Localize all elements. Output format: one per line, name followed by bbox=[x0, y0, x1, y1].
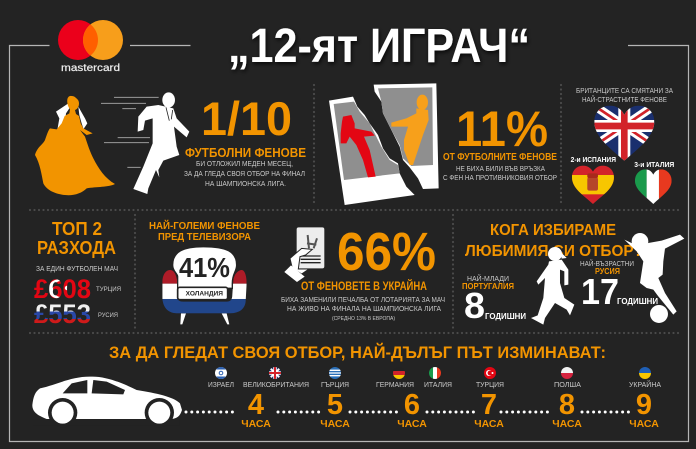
panel heading: choosing a team: ЛЮБИМИЯ СИ ОТБОР? bbox=[465, 243, 643, 260]
panel: top 2 expenses bbox=[34, 219, 121, 329]
stat: 11%: ОТ ФУТБОЛНИТЕ ФЕНОВЕ bbox=[443, 151, 557, 163]
panel: top 2 expenses: £608 bbox=[34, 274, 91, 304]
stat: youngest fans: НАЙ-МЛАДИ bbox=[467, 274, 509, 283]
stat: 66%: (СРЕДНО 13% В ЕВРОПА) bbox=[332, 316, 395, 322]
icon: car bbox=[32, 377, 182, 427]
icon: Spain heart: 2-и ИСПАНИЯ bbox=[571, 157, 616, 164]
stat: youngest fans: ГОДИШНИ bbox=[485, 311, 526, 321]
travel hours: 7 bbox=[481, 389, 497, 421]
stat: 11%: 11% bbox=[456, 101, 548, 157]
panel: top 2 expenses: ТОП 2 bbox=[52, 219, 102, 239]
icon: bride bbox=[35, 96, 115, 195]
stat: youngest fans: ПОРТУГАЛИЯ bbox=[462, 281, 514, 291]
flag: Israel bbox=[215, 367, 227, 379]
panel heading: choosing a team: КОГА ИЗБИРАМЕ bbox=[490, 222, 616, 239]
stat: oldest fans: РУСИЯ bbox=[595, 267, 620, 276]
title: „12-ят ИГРАЧ“ bbox=[228, 20, 530, 73]
icon: hand with lottery ticket bbox=[284, 227, 324, 282]
stat: 1/10: ФУТБОЛНИ ФЕНОВЕ bbox=[185, 146, 306, 160]
travel hours: ЧАСА bbox=[241, 418, 271, 430]
travel hours: ЧАСА bbox=[552, 418, 582, 430]
flag: Greece bbox=[329, 367, 341, 379]
icon: Italy heart bbox=[633, 162, 674, 205]
stat: 1/10: НА ШАМПИОНСКА ЛИГА. bbox=[205, 179, 286, 188]
icon: sofa with Dutch flag: ХОЛАНДИЯ bbox=[186, 291, 223, 298]
country labels bbox=[208, 380, 661, 389]
panel: TV fans heading: НАЙ-ГОЛЕМИ ФЕНОВЕ bbox=[149, 219, 260, 232]
country labels: ГЕРМАНИЯ bbox=[376, 382, 414, 389]
flag: UK bbox=[269, 367, 281, 379]
stat: 66% bbox=[281, 222, 445, 322]
travel hours: ЧАСА bbox=[629, 418, 659, 430]
flag: Poland bbox=[561, 367, 573, 379]
stat: oldest fans: ГОДИШНИ bbox=[617, 296, 658, 306]
flag: Italy bbox=[429, 367, 441, 379]
panel: top 2 expenses: £553 bbox=[34, 299, 91, 329]
icon: Italy heart: 3-и ИТАЛИЯ bbox=[634, 162, 674, 169]
stat: 1/10 bbox=[184, 92, 306, 188]
flag: Turkey bbox=[484, 367, 496, 379]
travel hours: 5 bbox=[327, 389, 343, 421]
travel heading: ЗА ДА ГЛЕДАТ СВОЯ ОТБОР, НАЙ-ДЪЛЪГ ПЪТ ИЗМИНАВАТ: bbox=[109, 343, 606, 362]
panel: top 2 expenses: ТУРЦИЯ bbox=[96, 286, 121, 293]
country labels: ПОЛША bbox=[554, 382, 581, 389]
travel hours: ЧАСА bbox=[397, 418, 427, 430]
stat: oldest fans bbox=[580, 259, 658, 312]
stat: 66%: 66% bbox=[337, 222, 436, 282]
country labels: ГЪРЦИЯ bbox=[321, 382, 349, 389]
country labels: ИТАЛИЯ bbox=[424, 382, 452, 389]
travel hours: 4 bbox=[248, 389, 264, 421]
icon: running groom bbox=[101, 92, 189, 194]
country labels: УКРАЙНА bbox=[629, 380, 661, 389]
travel hours: ЧАСА bbox=[474, 418, 504, 430]
flag: Germany bbox=[393, 371, 405, 379]
passionate fans text: БРИТАНЦИТЕ СА СМЯТАНИ ЗА bbox=[576, 88, 673, 95]
travel hours: 6 bbox=[404, 389, 420, 421]
icon: sofa with Dutch flag: 41% bbox=[179, 252, 230, 283]
panel: TV fans heading: ПРЕД ТЕЛЕВИЗОРА bbox=[158, 231, 251, 243]
panel: top 2 expenses: РАЗХОДА bbox=[37, 238, 116, 258]
icon: girl silhouette bbox=[531, 247, 574, 325]
flag: Ukraine bbox=[639, 367, 651, 379]
icon: sofa with Dutch flag bbox=[160, 247, 250, 324]
icon: torn photo bbox=[329, 83, 439, 205]
dotted separators bbox=[30, 85, 680, 333]
stat: youngest fans: 8 bbox=[464, 285, 485, 326]
mastercard logo bbox=[58, 20, 123, 74]
stat: 1/10: 1/10 bbox=[201, 92, 292, 145]
stat: 1/10: БИ ОТЛОЖИЛ МЕДЕН МЕСЕЦ, bbox=[196, 159, 293, 168]
travel hours: 9 bbox=[636, 389, 652, 421]
stat: 66%: БИХА ЗАМЕНИЛИ ПЕЧАЛБА ОТ ЛОТАРИЯТА ЗА МАЧ bbox=[281, 297, 445, 304]
stat: oldest fans: НАЙ-ВЪЗРАСТНИ bbox=[580, 259, 634, 268]
passionate fans text bbox=[576, 88, 673, 104]
stat: 11% bbox=[443, 101, 557, 182]
panel heading: choosing a team bbox=[465, 222, 643, 260]
country labels: ВЕЛИКОБРИТАНИЯ bbox=[243, 382, 309, 389]
stat: 1/10: ЗА ДА ГЛЕДА СВОЯ ОТБОР НА ФИНАЛ bbox=[184, 169, 305, 178]
country labels: ТУРЦИЯ bbox=[476, 382, 504, 389]
icon: Spain heart bbox=[570, 157, 617, 205]
travel hours: ЧАСА bbox=[320, 418, 350, 430]
passionate fans text: НАЙ-СТРАСТНИТЕ ФЕНОВЕ bbox=[582, 95, 667, 104]
icon: UK heart bbox=[593, 105, 655, 162]
dotted route bbox=[186, 410, 630, 414]
country labels: ИЗРАЕЛ bbox=[208, 382, 234, 389]
panel: TV fans heading bbox=[149, 219, 260, 243]
travel hours bbox=[241, 389, 659, 430]
panel: top 2 expenses: РУСИЯ bbox=[98, 312, 118, 319]
travel hours: 8 bbox=[559, 389, 575, 421]
stat: oldest fans: 17 bbox=[581, 271, 619, 312]
mastercard logo: mastercard bbox=[61, 63, 120, 74]
panel: top 2 expenses: ЗА ЕДИН ФУТБОЛЕН МАЧ bbox=[36, 266, 118, 273]
stat: 66%: НА ЖИВО НА ФИНАЛА НА ШАМПИОНСКА ЛИГА bbox=[287, 306, 441, 313]
stat: youngest fans bbox=[462, 274, 526, 326]
icon: boy silhouette with ball bbox=[624, 233, 684, 323]
stat: 66%: ОТ ФЕНОВЕТЕ В УКРАЙНА bbox=[301, 280, 427, 293]
stat: 11%: НЕ БИХА БИЛИ ВЪВ ВРЪЗКА bbox=[456, 166, 545, 173]
stat: 11%: С ФЕН НА ПРОТИВНИКОВИЯ ОТБОР bbox=[443, 175, 557, 182]
